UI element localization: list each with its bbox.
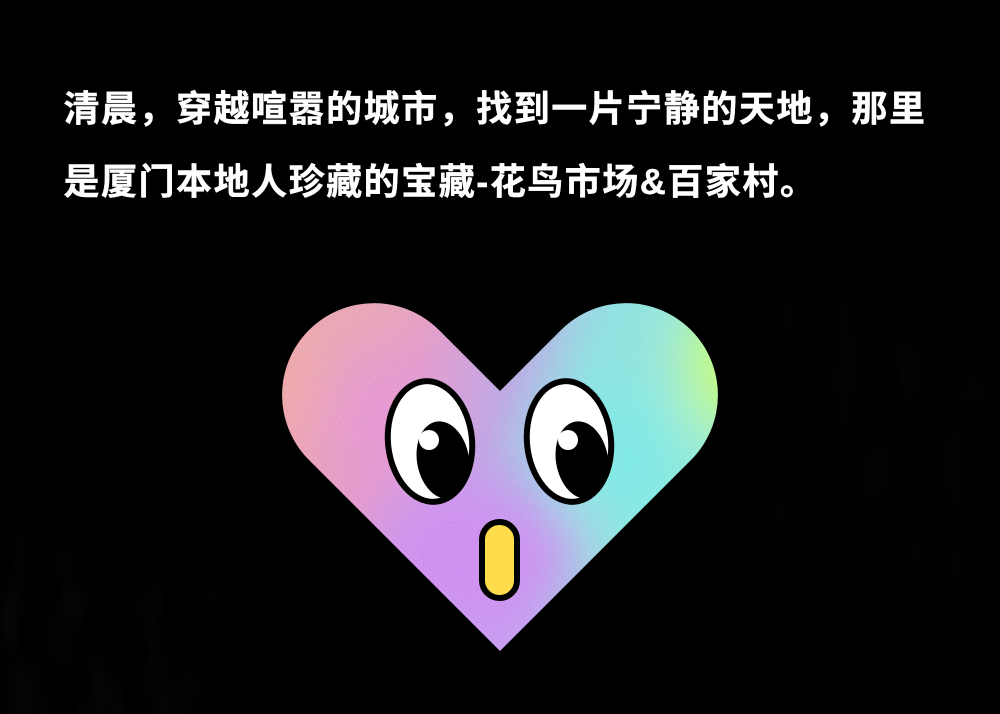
right eye	[521, 377, 617, 506]
text line 2: 是厦门本地人珍藏的宝藏-花鸟市场&百家村。	[64, 161, 817, 202]
intro text block	[64, 88, 926, 202]
heart body with gradient	[282, 303, 718, 651]
heart character	[282, 303, 718, 651]
left eye	[382, 377, 478, 506]
text line 1: 清晨，穿越喧嚣的城市，找到一片宁静的天地，那里	[64, 88, 926, 129]
mouth	[482, 522, 517, 598]
